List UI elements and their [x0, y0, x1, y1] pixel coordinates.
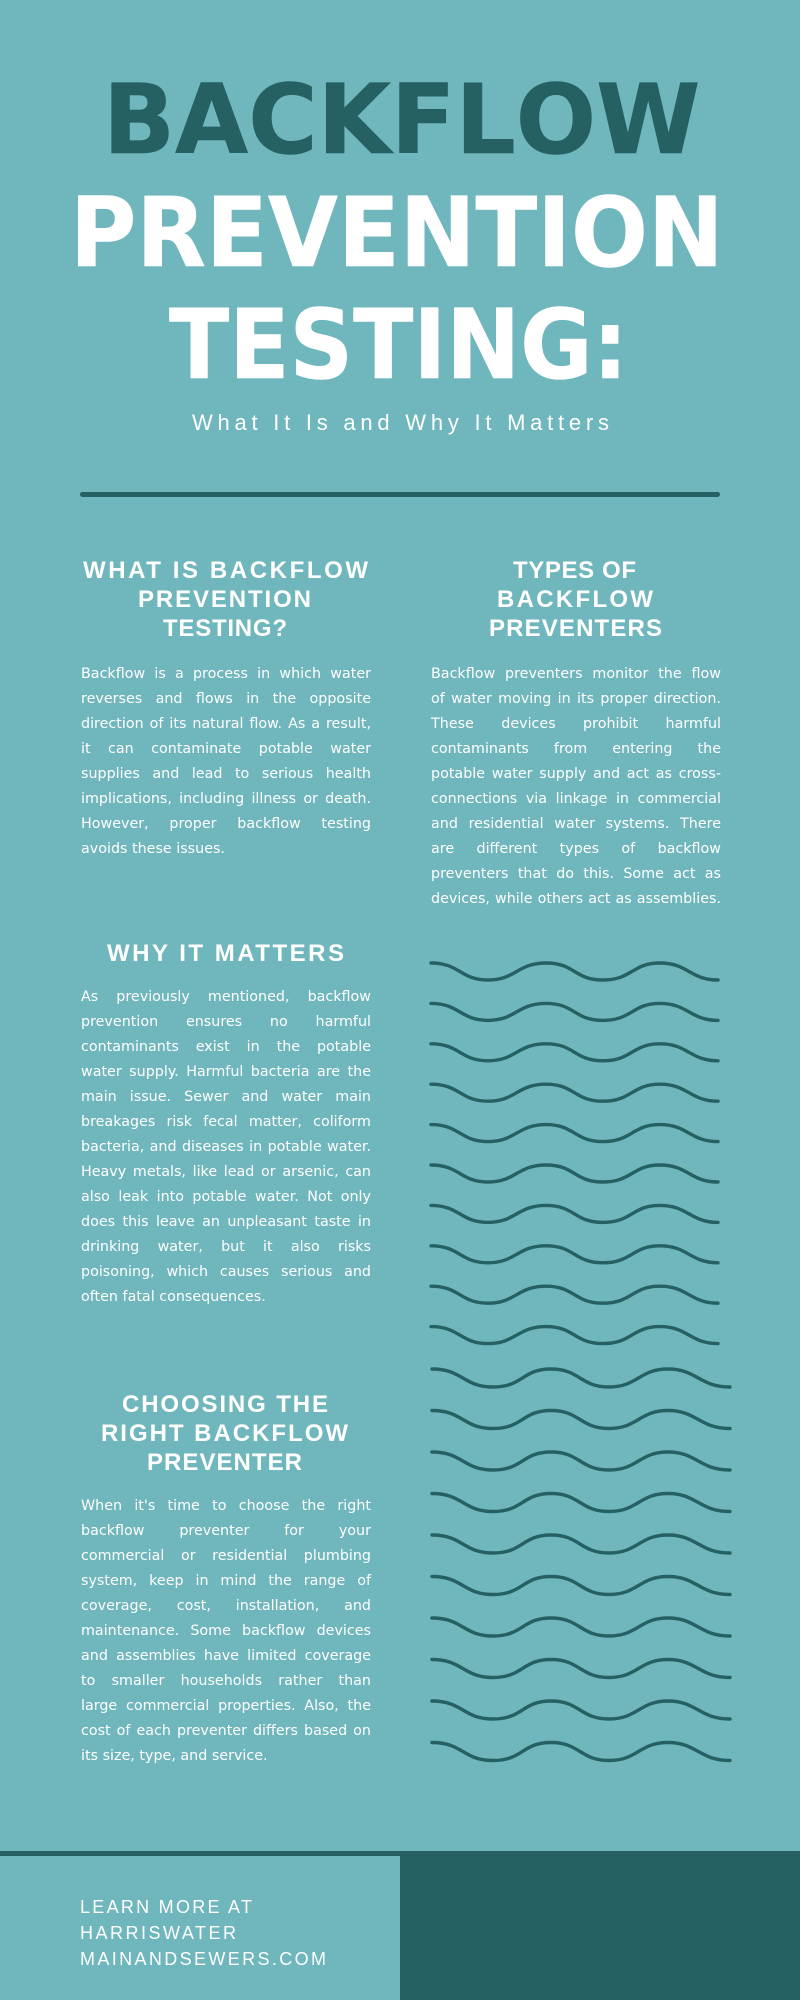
body text: backflow preventer for your [81, 1523, 371, 1539]
body text: breakages risk fecal matter, coliform [81, 1114, 371, 1130]
body text: often fatal consequences. [81, 1289, 266, 1305]
divider rule [80, 492, 720, 497]
body text: potable water supply and act as cross- [431, 766, 721, 782]
body text: However, proper backflow testing [81, 816, 371, 832]
body text: These devices prohibit harmful [431, 716, 721, 732]
body text: devices, while others act as assemblies. [431, 891, 721, 907]
heading [489, 557, 662, 642]
heading: BACKFLOW [497, 586, 653, 613]
body text: contaminants exist in the potable [81, 1039, 371, 1055]
body text: supplies and lead to serious health [81, 766, 371, 782]
body text: commercial or residential plumbing [81, 1548, 371, 1564]
body text: water supply. Harmful bacteria are the [81, 1064, 371, 1080]
body text: poisoning, which causes serious and [81, 1264, 371, 1280]
body text: Heavy metals, like lead or arsenic, can [81, 1164, 371, 1180]
body text [81, 1498, 372, 1764]
heading: TYPES OF [513, 557, 636, 584]
title line: Backflow: BACKFLOW [103, 65, 700, 176]
heading: PREVENTERS [489, 615, 662, 642]
body text: it can contaminate potable water [81, 741, 371, 757]
heading: PREVENTER [147, 1449, 302, 1476]
body text: As previously mentioned, backflow [81, 989, 371, 1005]
title line: Prevention: PREVENTION [70, 178, 724, 290]
subtitle: What It Is and Why It Matters [192, 410, 609, 435]
heading: TESTING? [163, 615, 287, 642]
body text: contaminants from entering the [431, 741, 721, 757]
body text: its size, type, and service. [81, 1748, 268, 1764]
body text: system, keep in mind the range of [81, 1573, 371, 1589]
heading: RIGHT BACKFLOW [101, 1420, 348, 1447]
body text: and residential water systems. There [431, 816, 721, 832]
title [70, 65, 724, 401]
heading: PREVENTION [138, 586, 311, 613]
panel: why it matters [81, 940, 371, 1305]
body text: avoids these issues. [81, 841, 225, 857]
heading: WHAT IS BACKFLOW [83, 557, 368, 584]
body text: main issue. Sewer and water main [81, 1089, 371, 1105]
body text: to smaller households rather than [81, 1673, 371, 1689]
body text: drinking water, but it also risks [81, 1239, 371, 1255]
footer call to action: HARRISWATER [80, 1923, 236, 1943]
body text: Backflow is a process in which water [81, 666, 371, 682]
body text: direction of its natural flow. As a result, [81, 716, 371, 732]
footer call to action: LEARN MORE AT [80, 1897, 252, 1917]
body text: preventers that do this. Some act as [431, 866, 721, 882]
heading: WHY IT MATTERS [107, 940, 344, 967]
body text: maintenance. Some backflow devices [81, 1623, 371, 1639]
heading [101, 1391, 348, 1476]
title line: Testing: TESTING: [169, 288, 628, 401]
body text [81, 666, 371, 857]
footer dark block [400, 1851, 800, 2000]
body text: does this leave an unpleasant taste in [81, 1214, 371, 1230]
body text: and assemblies have limited coverage [81, 1648, 371, 1664]
body text: coverage, cost, installation, and [81, 1598, 371, 1614]
body text: When it's time to choose the right [81, 1498, 371, 1514]
body text: also leak into potable water. Not only [81, 1189, 371, 1205]
body text: large commercial properties. Also, the [81, 1698, 371, 1714]
body text: reverses and flows in the opposite [81, 691, 371, 707]
body text [430, 666, 721, 907]
body text: bacteria, and diseases in potable water. [81, 1139, 371, 1155]
panel: choosing the right backflow preventer [81, 1391, 372, 1764]
panel: what is backflow prevention testing [81, 557, 371, 857]
body text: implications, including illness or death. [81, 791, 371, 807]
body text: cost of each preventer differs based on [81, 1723, 371, 1739]
body text: connections via linkage in commercial [431, 791, 721, 807]
body text: are different types of backflow [431, 841, 721, 857]
footer call to action: MAINANDSEWERS.COM [80, 1949, 326, 1969]
heading [83, 557, 368, 642]
panel: types of backflow preventers [430, 557, 721, 907]
body text: prevention ensures no harmful [81, 1014, 371, 1030]
body text: Backflow preventers monitor the flow [431, 666, 721, 682]
body text: of water moving in its proper direction. [431, 691, 721, 707]
footer band [0, 1851, 400, 1856]
body text [81, 989, 371, 1305]
heading: CHOOSING THE [122, 1391, 328, 1418]
